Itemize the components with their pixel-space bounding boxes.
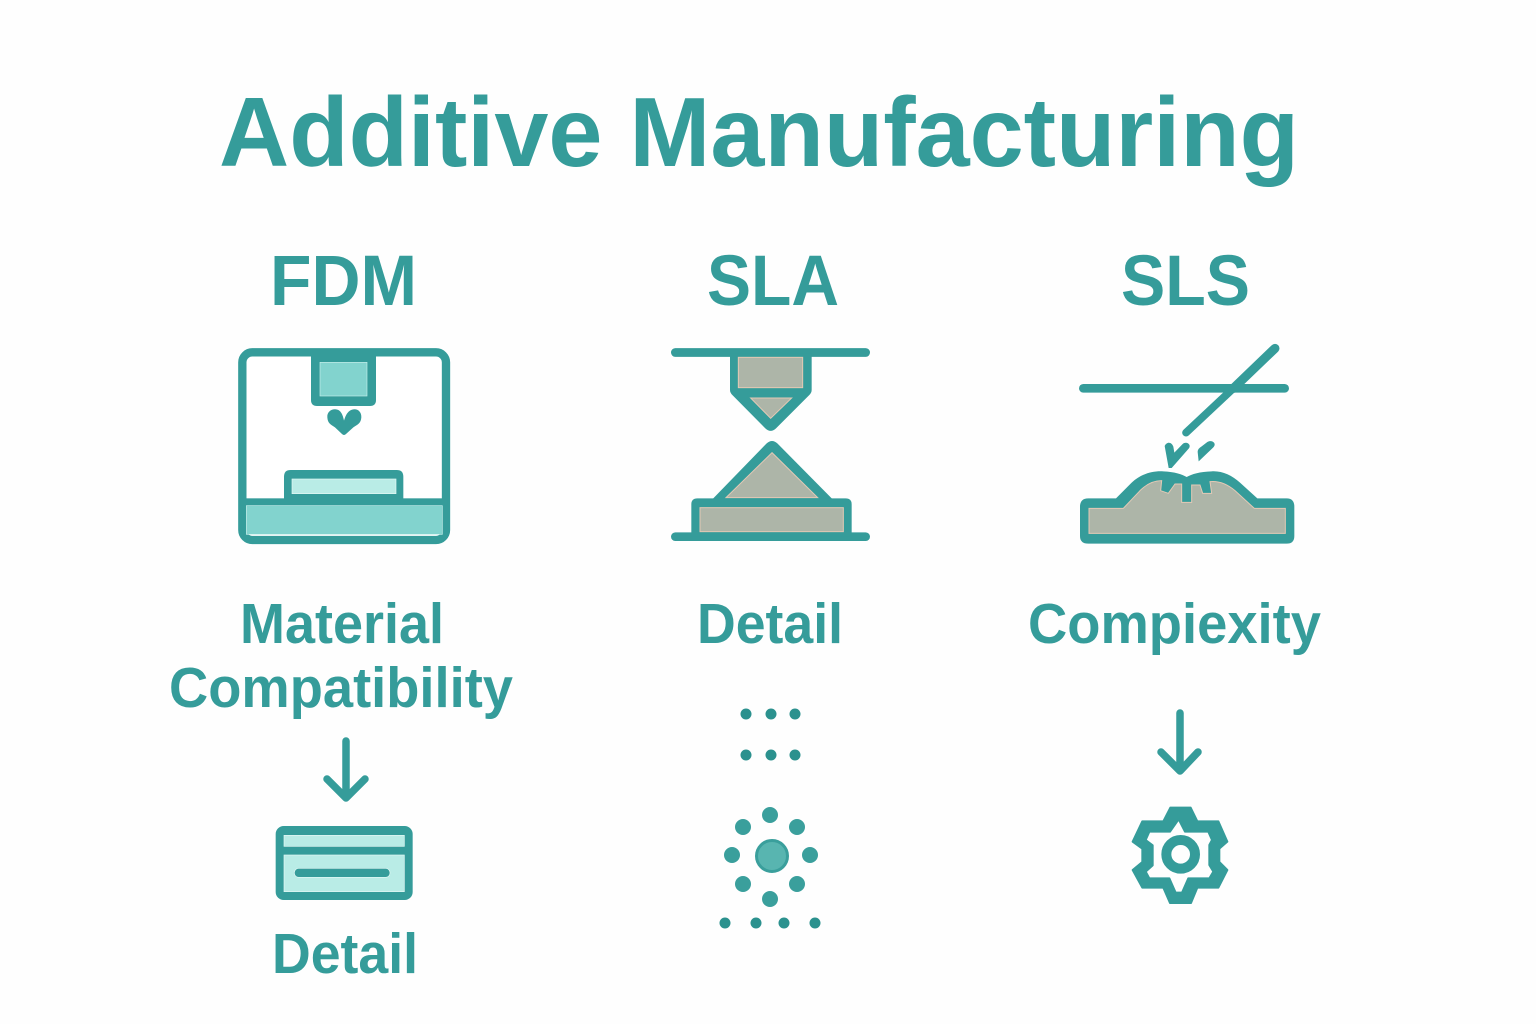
title: Additive Manufacturing — [219, 77, 1299, 187]
icon: bottom dot row — [720, 918, 820, 928]
arrow: SLS down — [1161, 713, 1198, 771]
icon: dot rows — [740, 708, 800, 760]
heading: SLA: SLA — [707, 242, 839, 321]
icon: FDM printer — [241, 350, 447, 540]
heading: FDM: FDM — [270, 242, 417, 321]
icon: SLS laser and powder — [1080, 348, 1294, 544]
icon: gear — [1133, 808, 1227, 903]
icon: SLA printer — [675, 352, 866, 537]
label: Compiexity: Compiexity — [1028, 592, 1321, 656]
heading: SLS: SLS — [1121, 242, 1250, 321]
label: Detail (SLA): Detail — [697, 592, 843, 656]
icon: radial dots — [724, 807, 818, 907]
label: Material Compatibility: Material — [240, 592, 444, 656]
label: Material Compatibility — [169, 592, 513, 720]
arrow: FDM down — [327, 741, 365, 798]
label: Material Compatibility: Compatibility — [169, 656, 513, 720]
label: Detail (FDM): Detail — [272, 922, 418, 986]
icon: detail card — [276, 826, 413, 900]
